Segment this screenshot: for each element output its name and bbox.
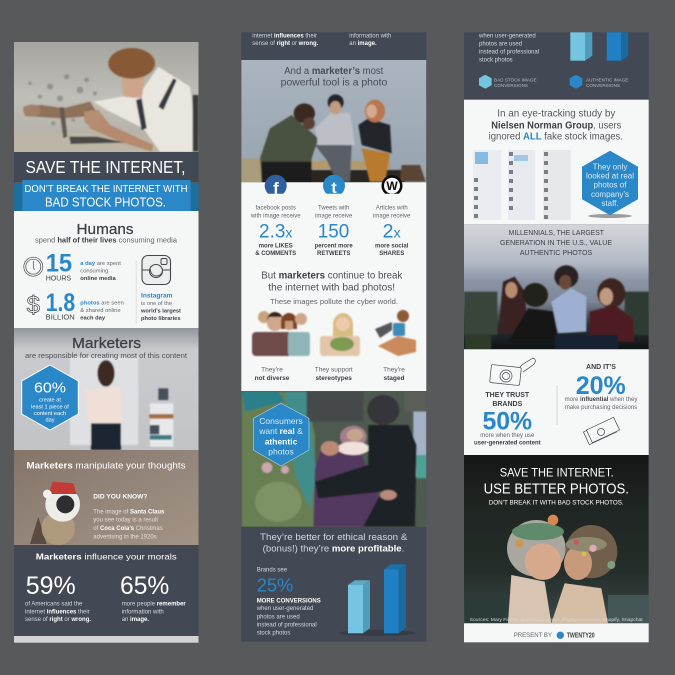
stat: tumblr: percent more bbox=[315, 244, 353, 250]
stat: 25 percent: photos are used bbox=[257, 614, 300, 620]
legend: authentic: AUTHENTIC IMAGE bbox=[586, 77, 628, 82]
stat: 1.8 billion bbox=[46, 289, 124, 321]
text: did you know: of Coca Cola’s Christmas bbox=[93, 526, 163, 532]
text: instagram: Instagram bbox=[141, 292, 173, 299]
panel: column one bbox=[14, 42, 201, 643]
closing heading: SAVE THE INTERNET. bbox=[500, 468, 614, 480]
legend: authentic: CONVERSIONS bbox=[586, 83, 620, 88]
icon: wordpress bbox=[382, 175, 402, 196]
legend: bad stock bbox=[479, 75, 537, 89]
stat: 59 percent: internet influences their bbox=[25, 609, 90, 615]
heading: humans: Humans bbox=[76, 221, 134, 238]
hexagon: real staff: They only bbox=[593, 162, 627, 171]
stat: facebook: 2.3x bbox=[259, 222, 292, 243]
stat: 25 percent bbox=[256, 568, 321, 636]
stat: 20 percent bbox=[565, 364, 637, 411]
stat: facebook: & COMMENTS bbox=[255, 251, 296, 257]
panel: trust stats bbox=[464, 349, 649, 455]
legend: authentic bbox=[570, 75, 628, 89]
icon: dollar sign: $ bbox=[27, 292, 40, 319]
hexagon: real staff: company’s bbox=[591, 190, 629, 199]
stat: 15 hours: online media bbox=[80, 276, 117, 282]
stat: 20 percent: more influential when they bbox=[565, 397, 637, 403]
stat: 15 hours bbox=[46, 250, 121, 283]
stat: facebook: more LIKES bbox=[259, 244, 293, 250]
panel: manipulate thoughts bbox=[14, 450, 198, 545]
caption: not diverse bbox=[255, 367, 290, 382]
stat: facebook bbox=[250, 206, 301, 257]
hexagon: real staff: photos of bbox=[594, 181, 627, 190]
ribbon: subtitle: DON’T BREAK THE INTERNET WITH bbox=[24, 184, 188, 195]
stat: tumblr: image receive bbox=[315, 213, 353, 219]
closing heading: USE BETTER PHOTOS. bbox=[484, 481, 629, 497]
continued conversions band: stock photos bbox=[479, 58, 513, 64]
ribbon: subtitle bbox=[22, 180, 191, 211]
icon: facebook: f bbox=[273, 179, 279, 198]
heading: millennials: AUTHENTIC PHOTOS bbox=[520, 248, 592, 257]
hexagon: 60 percent: day bbox=[45, 418, 55, 424]
heading: marketer's tool bbox=[281, 66, 387, 89]
stat: 50 percent: more when they use bbox=[480, 433, 535, 439]
heading: bad photos: But marketers continue to break bbox=[261, 270, 402, 281]
caption: staged: They’re bbox=[383, 367, 405, 374]
stat: 20 percent: AND IT’S bbox=[586, 364, 616, 371]
stat: 65 percent: 65% bbox=[120, 572, 169, 600]
heading: marketer's tool: powerful tool is a photo bbox=[281, 78, 387, 89]
stat: 15 hours: consuming bbox=[80, 268, 108, 274]
stat: 25 percent: 25% bbox=[257, 575, 293, 596]
heading: manipulate thoughts: Marketers manipulate your thoughts bbox=[26, 459, 186, 470]
bars continued bbox=[570, 32, 628, 61]
hexagon: real staff: looked at real bbox=[586, 171, 634, 180]
heading line two: (bonus!) they’re more profitable. bbox=[263, 544, 404, 554]
stat: 65 percent bbox=[120, 572, 186, 623]
continued stats band: sense of right or wrong. bbox=[252, 41, 319, 47]
footer: present by bbox=[464, 623, 649, 642]
heading: eye tracking bbox=[489, 109, 623, 143]
stat: 50 percent bbox=[474, 392, 541, 446]
stat: 50 percent: 50% bbox=[482, 407, 532, 435]
panel: profitable bbox=[241, 527, 426, 642]
icon: instagram bbox=[142, 256, 170, 284]
stat: wordpress: image receive bbox=[373, 213, 411, 219]
heading: profitable: They’re better for ethical reason & bbox=[260, 532, 408, 542]
photo: millennials on hillside bbox=[464, 224, 650, 350]
stat: 1.8 billion: & shared online bbox=[80, 308, 121, 314]
hexagon: real staff: staff. bbox=[601, 199, 619, 208]
panel: column three bbox=[464, 32, 650, 642]
closing heading: DON’T BREAK IT WITH BAD STOCK PHOTOS. bbox=[489, 499, 624, 506]
stat: wordpress bbox=[373, 206, 411, 257]
stat: 50 percent: THEY TRUST bbox=[485, 392, 530, 399]
caption: stereotypes bbox=[315, 367, 353, 382]
stat: 25 percent: Brands see bbox=[257, 568, 288, 574]
subheading: spend half of their lives consuming media bbox=[35, 238, 177, 245]
icon: wordpress: W bbox=[386, 179, 398, 193]
photo: stereotype woman with salad bbox=[320, 313, 360, 356]
panel: column two bbox=[241, 32, 427, 642]
bar chart bbox=[339, 564, 415, 636]
heading: bad photos: These images pollute the cyber world. bbox=[270, 299, 398, 306]
stat: tumblr: RETWEETS bbox=[317, 251, 350, 257]
stat: tumblr bbox=[315, 206, 353, 257]
hexagon: consumers want real: photos bbox=[268, 447, 294, 457]
hexagon: consumers want real: Consumers bbox=[259, 416, 303, 426]
hexagon: consumers want real: athentic bbox=[265, 436, 298, 446]
photo: three friends eating bbox=[241, 60, 426, 183]
stat: 65 percent: an image. bbox=[122, 617, 149, 623]
closing heading bbox=[484, 468, 629, 506]
stat: 15 hours: a day are spent bbox=[80, 261, 121, 267]
stat: tumblr: Tweets with bbox=[318, 206, 349, 212]
panel: marketers bbox=[14, 328, 198, 450]
text: instagram: world’s largest bbox=[140, 308, 181, 314]
stat: facebook: with image receive bbox=[250, 213, 301, 219]
stat: 1.8 billion: each day bbox=[80, 315, 106, 321]
text: did you know: advertising in the 1920s bbox=[93, 534, 157, 540]
footer: present by: PRESENT BY bbox=[514, 632, 553, 639]
icon: camera bbox=[490, 358, 535, 386]
heading: bad photos bbox=[261, 270, 402, 306]
stat: 65 percent: information with bbox=[122, 609, 164, 615]
stat: wordpress: SHARES bbox=[379, 251, 404, 257]
caption: not diverse: not diverse bbox=[255, 375, 290, 382]
stat: facebook: facebook posts bbox=[256, 206, 296, 212]
text: instagram: photo libraries bbox=[141, 316, 181, 322]
caption: staged: staged bbox=[384, 375, 405, 382]
icon: clock bbox=[24, 257, 43, 276]
stat: 25 percent: instead of professional bbox=[257, 622, 317, 628]
stat: wordpress: more social bbox=[375, 244, 409, 250]
continued conversions band bbox=[464, 32, 649, 100]
text: did you know bbox=[93, 494, 165, 540]
stat: 50 percent: BRANDS bbox=[492, 401, 523, 408]
heading: eye tracking: Nielsen Norman Group, users bbox=[491, 120, 621, 131]
stat: tumblr: 150 bbox=[318, 222, 349, 243]
stat: 59 percent: of Americans said the bbox=[25, 602, 83, 608]
title: save the internet: SAVE THE INTERNET, bbox=[26, 157, 186, 177]
photo: pug in santa hat bbox=[14, 450, 198, 545]
stat: wordpress: Articles with bbox=[376, 206, 408, 212]
hexagon: consumers want real bbox=[253, 403, 309, 466]
heading: marketer's tool: And a marketer’s most bbox=[284, 66, 384, 77]
panel: eye tracking bbox=[464, 100, 649, 224]
stat: 25 percent: when user-generated bbox=[256, 606, 313, 612]
hexagon: 60 percent: create at bbox=[39, 397, 61, 403]
photo: staged fitness woman bbox=[375, 310, 416, 356]
logo: twenty20: TWENTY20 bbox=[567, 632, 595, 640]
continued stats band: an image. bbox=[349, 41, 377, 47]
sources: Sources: Mary Fickler, BuzzSumo, Ipsos, EngageSciences, Shopify, Snapchat bbox=[470, 617, 643, 622]
logo: twenty20 bbox=[557, 632, 595, 640]
text: did you know: The image of Santa Claus bbox=[93, 509, 165, 515]
heatmap screenshots bbox=[473, 150, 571, 220]
stat: 1.8 billion: 1.8 bbox=[46, 289, 75, 317]
legend: bad stock: CONVERSIONS bbox=[494, 83, 528, 88]
continued stats band: internet influences their bbox=[252, 33, 317, 39]
photo: women with flower crowns bbox=[464, 455, 650, 623]
hexagon: real staff bbox=[582, 151, 638, 218]
stat: 15 hours: 15 bbox=[46, 250, 72, 278]
heading: eye tracking: In an eye-tracking study by bbox=[497, 109, 615, 120]
stat: 1.8 billion: BILLION bbox=[46, 312, 75, 321]
caption: stereotypes: stereotypes bbox=[315, 375, 352, 382]
heading: millennials bbox=[500, 228, 612, 257]
text: did you know: DID YOU KNOW? bbox=[93, 494, 147, 501]
heading: millennials: GENERATION IN THE U.S., VALUE bbox=[500, 238, 612, 247]
stat: 50 percent: user-generated content bbox=[474, 440, 541, 446]
stat: 59 percent bbox=[25, 572, 91, 623]
ribbon: side fold left bbox=[14, 184, 22, 211]
panel: closing photo bbox=[464, 455, 650, 623]
photo: angry woman punching laptop bbox=[14, 42, 201, 153]
hexagon: consumers want real: want real & bbox=[258, 426, 303, 436]
panel: morals bbox=[14, 545, 198, 636]
stat: 1.8 billion: photos are seen bbox=[80, 301, 124, 307]
heading band bbox=[14, 152, 198, 182]
heading: morals: Marketers influence your morals bbox=[36, 551, 177, 561]
photo: woman at canvas bbox=[14, 328, 198, 450]
stat: 25 percent: stock photos bbox=[257, 630, 290, 636]
text: did you know: you see today is a result bbox=[93, 518, 158, 524]
stat: 59 percent: sense of right or wrong. bbox=[25, 617, 91, 623]
icon: facebook bbox=[264, 174, 287, 194]
heading: eye tracking: ignored ALL fake stock images. bbox=[489, 132, 623, 143]
photo: embrace at graffiti wall bbox=[241, 391, 427, 527]
caption: stereotypes: They support bbox=[315, 367, 353, 374]
hexagon: 60 percent: content each bbox=[34, 411, 66, 417]
text: instagram: is one of the bbox=[141, 301, 172, 307]
legend: bad stock: BAD STOCK IMAGE bbox=[494, 77, 537, 82]
continued conversions band: when user-generated bbox=[478, 33, 536, 39]
stat: 20 percent: make purchasing decisions bbox=[565, 405, 637, 411]
heading: bad photos: the internet with bad photos! bbox=[268, 282, 395, 293]
stat: wordpress: 2x bbox=[383, 222, 401, 243]
panel: humans bbox=[14, 211, 198, 328]
stat: 59 percent: 59% bbox=[26, 572, 76, 600]
panel: social stats bbox=[241, 175, 426, 391]
hexagon: 60 percent bbox=[22, 365, 78, 430]
continued stats band: information with bbox=[349, 33, 391, 39]
photo: not diverse group bbox=[252, 311, 310, 356]
hexagon: 60 percent: least 1 piece of bbox=[31, 404, 69, 410]
icon: tumblr bbox=[323, 174, 345, 194]
continued conversions band: photos are used bbox=[479, 42, 522, 48]
ribbon: subtitle: BAD STOCK PHOTOS. bbox=[45, 196, 166, 210]
heading: millennials: MILLENNIALS, THE LARGEST bbox=[509, 228, 604, 237]
continued stats band bbox=[241, 32, 426, 60]
heading: marketers: Marketers bbox=[72, 335, 141, 352]
stat: 20 percent: 20% bbox=[576, 372, 626, 400]
icon: tumblr: t bbox=[331, 180, 337, 197]
icon: money bbox=[583, 417, 620, 445]
text: instagram bbox=[140, 292, 181, 322]
caption: not diverse: They’re bbox=[261, 367, 283, 374]
ribbon: side fold right bbox=[191, 184, 198, 211]
caption: staged bbox=[383, 367, 405, 382]
stat: 65 percent: more people remember bbox=[122, 602, 186, 608]
continued conversions band: instead of professional bbox=[479, 50, 539, 56]
stat: 15 hours: HOURS bbox=[46, 274, 71, 283]
subheading: are responsible for creating most of this content bbox=[25, 353, 187, 360]
hexagon: 60 percent: 60% bbox=[34, 379, 66, 396]
stat: 25 percent: MORE CONVERSIONS bbox=[257, 598, 321, 604]
